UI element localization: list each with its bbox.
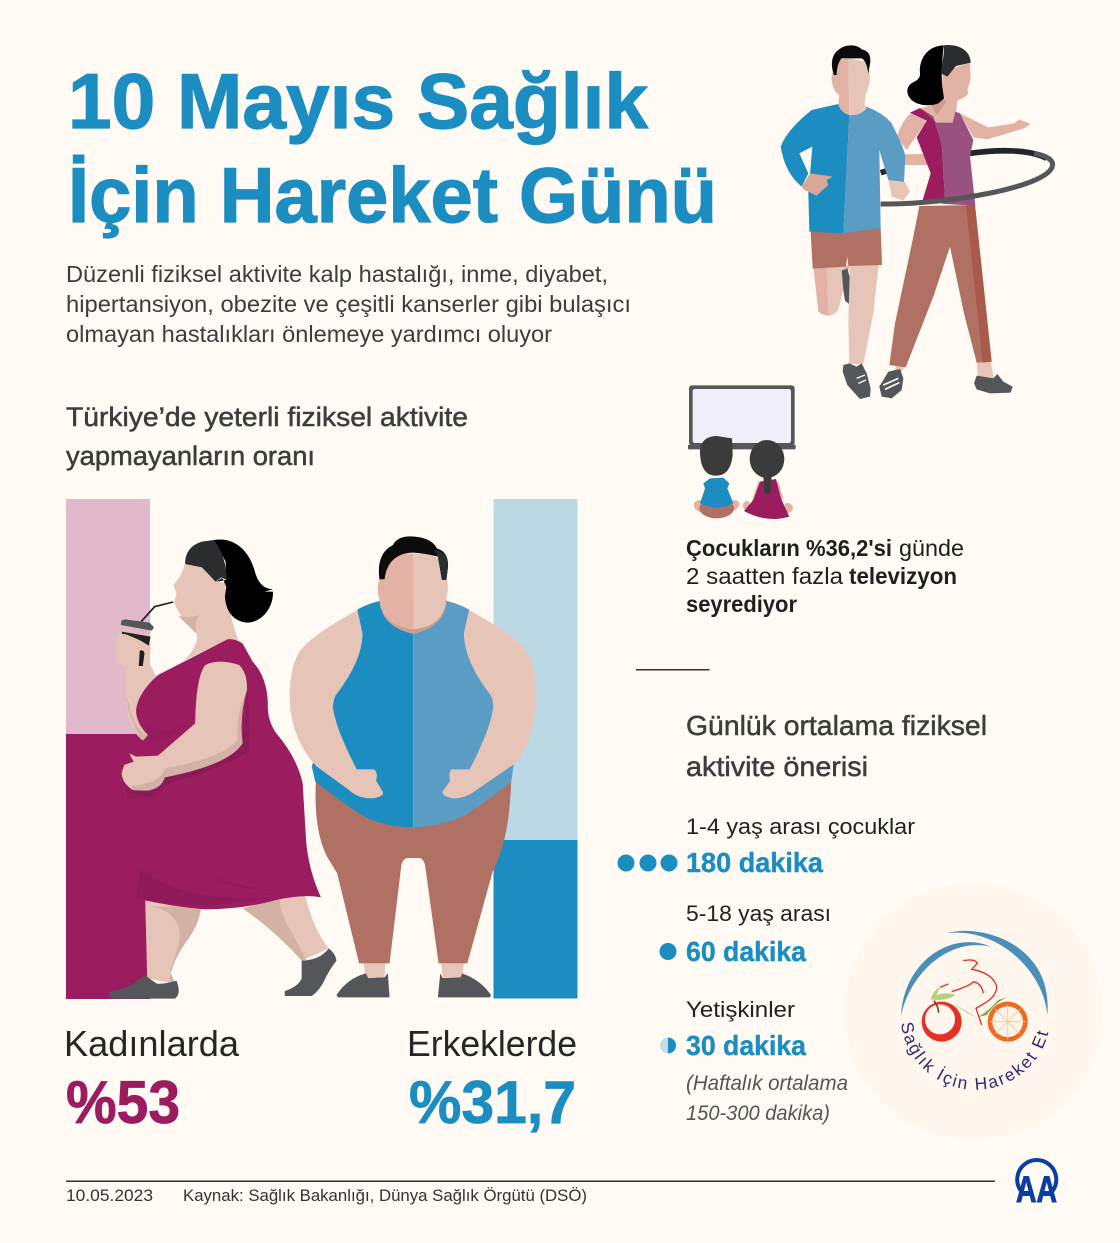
recommendation: children 1-4 xyxy=(618,814,915,878)
stat: women: Kadınlarda xyxy=(64,1023,240,1064)
intro text: hipertansiyon, obezite ve çeşitli kanserler gibi bulaşıcı xyxy=(66,291,631,317)
girl xyxy=(743,501,793,513)
neck and head xyxy=(173,564,238,661)
recommendation: children 1-4: 1-4 yaş arası çocuklar xyxy=(686,814,915,839)
title xyxy=(68,57,717,239)
footer: Kaynak: Sağlık Bakanlığı, Dünya Sağlık Örgütü (DSÖ) xyxy=(183,1187,587,1205)
recommendation: adults: Yetişkinler xyxy=(686,997,795,1022)
callout: children TV text: televizyon xyxy=(849,563,957,589)
callout: children TV text: Çocukların %36,2'si xyxy=(686,535,892,561)
arms xyxy=(290,610,383,798)
bar chart: women xyxy=(66,499,150,999)
callout: children TV text: günde xyxy=(899,535,964,561)
title: İçin Hareket Günü xyxy=(68,151,717,239)
dress xyxy=(126,639,321,909)
callout: children TV text: seyrediyor xyxy=(686,591,797,617)
callout: children TV text: 2 saatten fazla xyxy=(686,563,843,589)
heading: inactivity rate: yapmayanların oranı xyxy=(66,441,315,471)
raised arm and cup xyxy=(126,662,156,741)
heading: daily recommendation xyxy=(686,710,987,782)
footer xyxy=(66,1180,995,1205)
title: 10 Mayıs Sağlık xyxy=(68,57,649,145)
heading: daily recommendation: Günlük ortalama fiziksel xyxy=(686,710,987,741)
illustration: overweight woman xyxy=(109,539,336,999)
shoes xyxy=(336,973,491,997)
heading: daily recommendation: aktivite önerisi xyxy=(686,751,868,782)
stat: men: Erkeklerde xyxy=(407,1023,577,1064)
recommendation: adults xyxy=(660,997,848,1125)
logo: Sağlık İçin Hareket Et xyxy=(901,930,1048,1090)
hair xyxy=(379,536,448,580)
stat: men: %31,7 xyxy=(409,1069,576,1136)
tv xyxy=(689,385,795,445)
heading: inactivity rate: Türkiye’de yeterli fiziksel aktivite xyxy=(66,402,468,432)
boy xyxy=(694,500,740,512)
logo: Sağlık İçin Hareket Et: Sağlık İçin Hareket Et xyxy=(902,1022,1048,1090)
stat: women: %53 xyxy=(66,1069,180,1136)
footer: 10.05.2023 xyxy=(66,1187,153,1205)
socks xyxy=(364,963,464,977)
heading: inactivity rate xyxy=(66,402,468,471)
woman xyxy=(893,362,994,381)
intro text: olmayan hastalıkları önlemeye yardımcı oluyor xyxy=(66,321,552,347)
recommendation: ages 5-18: 60 dakika xyxy=(686,936,806,967)
tank top right xyxy=(413,601,514,827)
recommendation: ages 5-18: 5-18 yaş arası xyxy=(686,901,831,926)
stat: women xyxy=(64,1023,240,1136)
recommendation: adults: 150-300 dakika) xyxy=(686,1102,830,1125)
hoop back xyxy=(881,151,1047,173)
legs xyxy=(145,898,201,984)
hair xyxy=(214,539,273,623)
hoop front xyxy=(881,153,1053,204)
bar chart: men xyxy=(494,499,578,998)
man xyxy=(813,266,850,315)
tank top left xyxy=(312,601,413,827)
head xyxy=(379,600,447,634)
illustration: children watching TV xyxy=(688,385,796,519)
illustration: overweight man xyxy=(290,536,536,997)
logo: AA xyxy=(1016,1160,1057,1210)
stat: men xyxy=(407,1023,577,1136)
logo: AA: AA xyxy=(1016,1169,1057,1210)
recommendation: ages 5-18 xyxy=(660,901,831,967)
callout: children TV text xyxy=(686,535,964,617)
lower arm xyxy=(122,662,247,791)
recommendation: adults: 30 dakika xyxy=(686,1030,806,1061)
illustration: active man and woman with hula hoop xyxy=(781,45,1053,399)
recommendation: children 1-4: 180 dakika xyxy=(686,847,823,878)
recommendation: adults: (Haftalık ortalama xyxy=(686,1072,848,1095)
intro text xyxy=(66,261,631,347)
intro text: Düzenli fiziksel aktivite kalp hastalığı, inme, diyabet, xyxy=(66,261,608,287)
pants xyxy=(316,780,511,963)
shoes xyxy=(109,975,179,999)
